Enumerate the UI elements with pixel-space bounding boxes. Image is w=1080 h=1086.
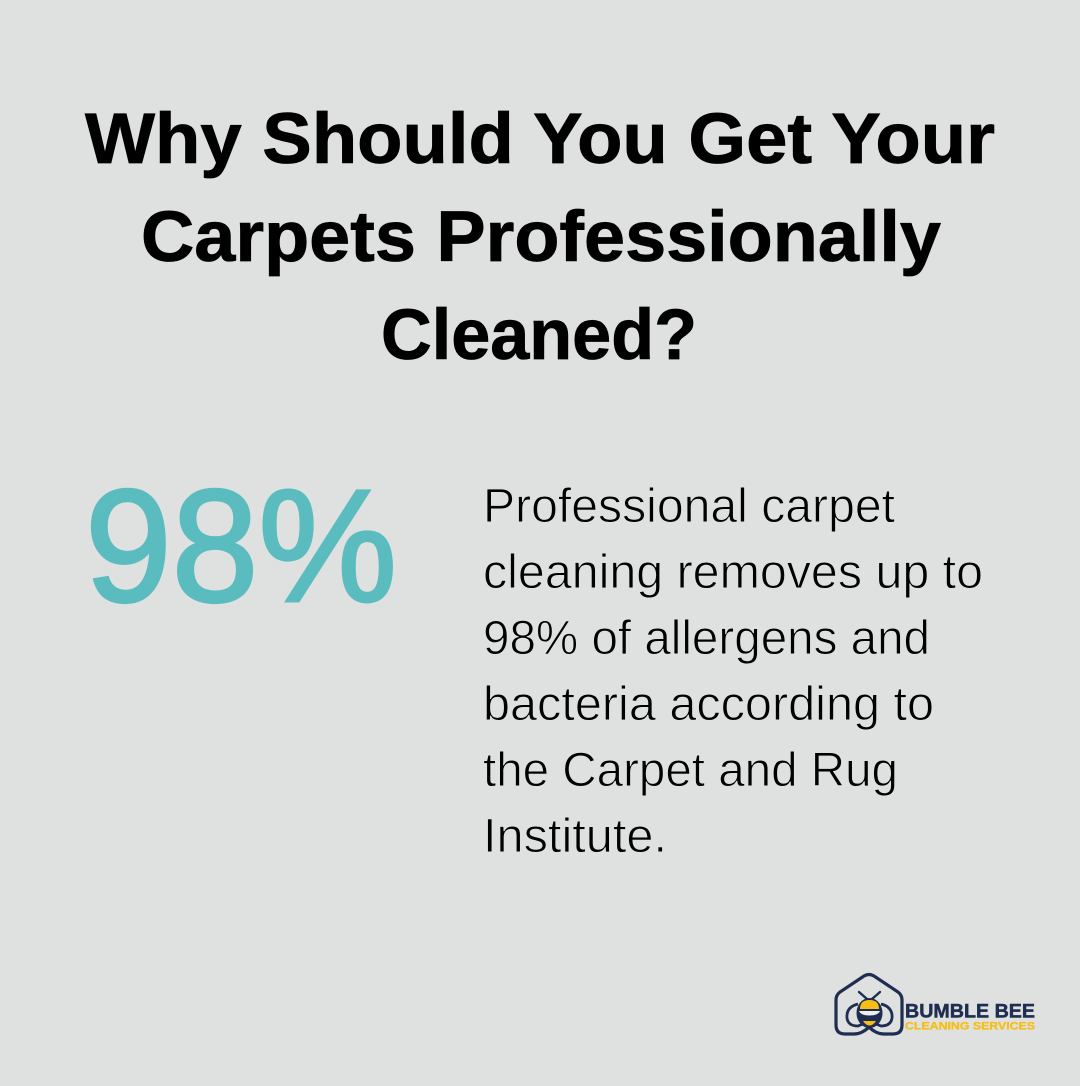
description text: Institute. bbox=[483, 810, 667, 863]
big statistic: 98%: 98% bbox=[85, 456, 397, 635]
description text: Professional carpet bbox=[483, 480, 895, 533]
icon: house with bee bbox=[836, 974, 902, 1034]
description text: bacteria according to bbox=[483, 678, 934, 731]
description text: 98% of allergens and bbox=[483, 612, 930, 665]
title: Why Should You Get Your bbox=[85, 100, 995, 179]
description text: cleaning removes up to bbox=[483, 546, 983, 599]
description text: the Carpet and Rug bbox=[483, 744, 898, 797]
title: Carpets Professionally bbox=[141, 198, 942, 277]
logo: Bumble Bee Cleaning Services bbox=[836, 974, 1035, 1034]
title: Cleaned? bbox=[381, 296, 697, 375]
description text bbox=[483, 480, 983, 863]
logo tagline: CLEANING SERVICES bbox=[905, 1020, 1035, 1032]
title bbox=[85, 100, 995, 375]
logo wordmark: BUMBLE BEE bbox=[905, 1000, 1035, 1022]
